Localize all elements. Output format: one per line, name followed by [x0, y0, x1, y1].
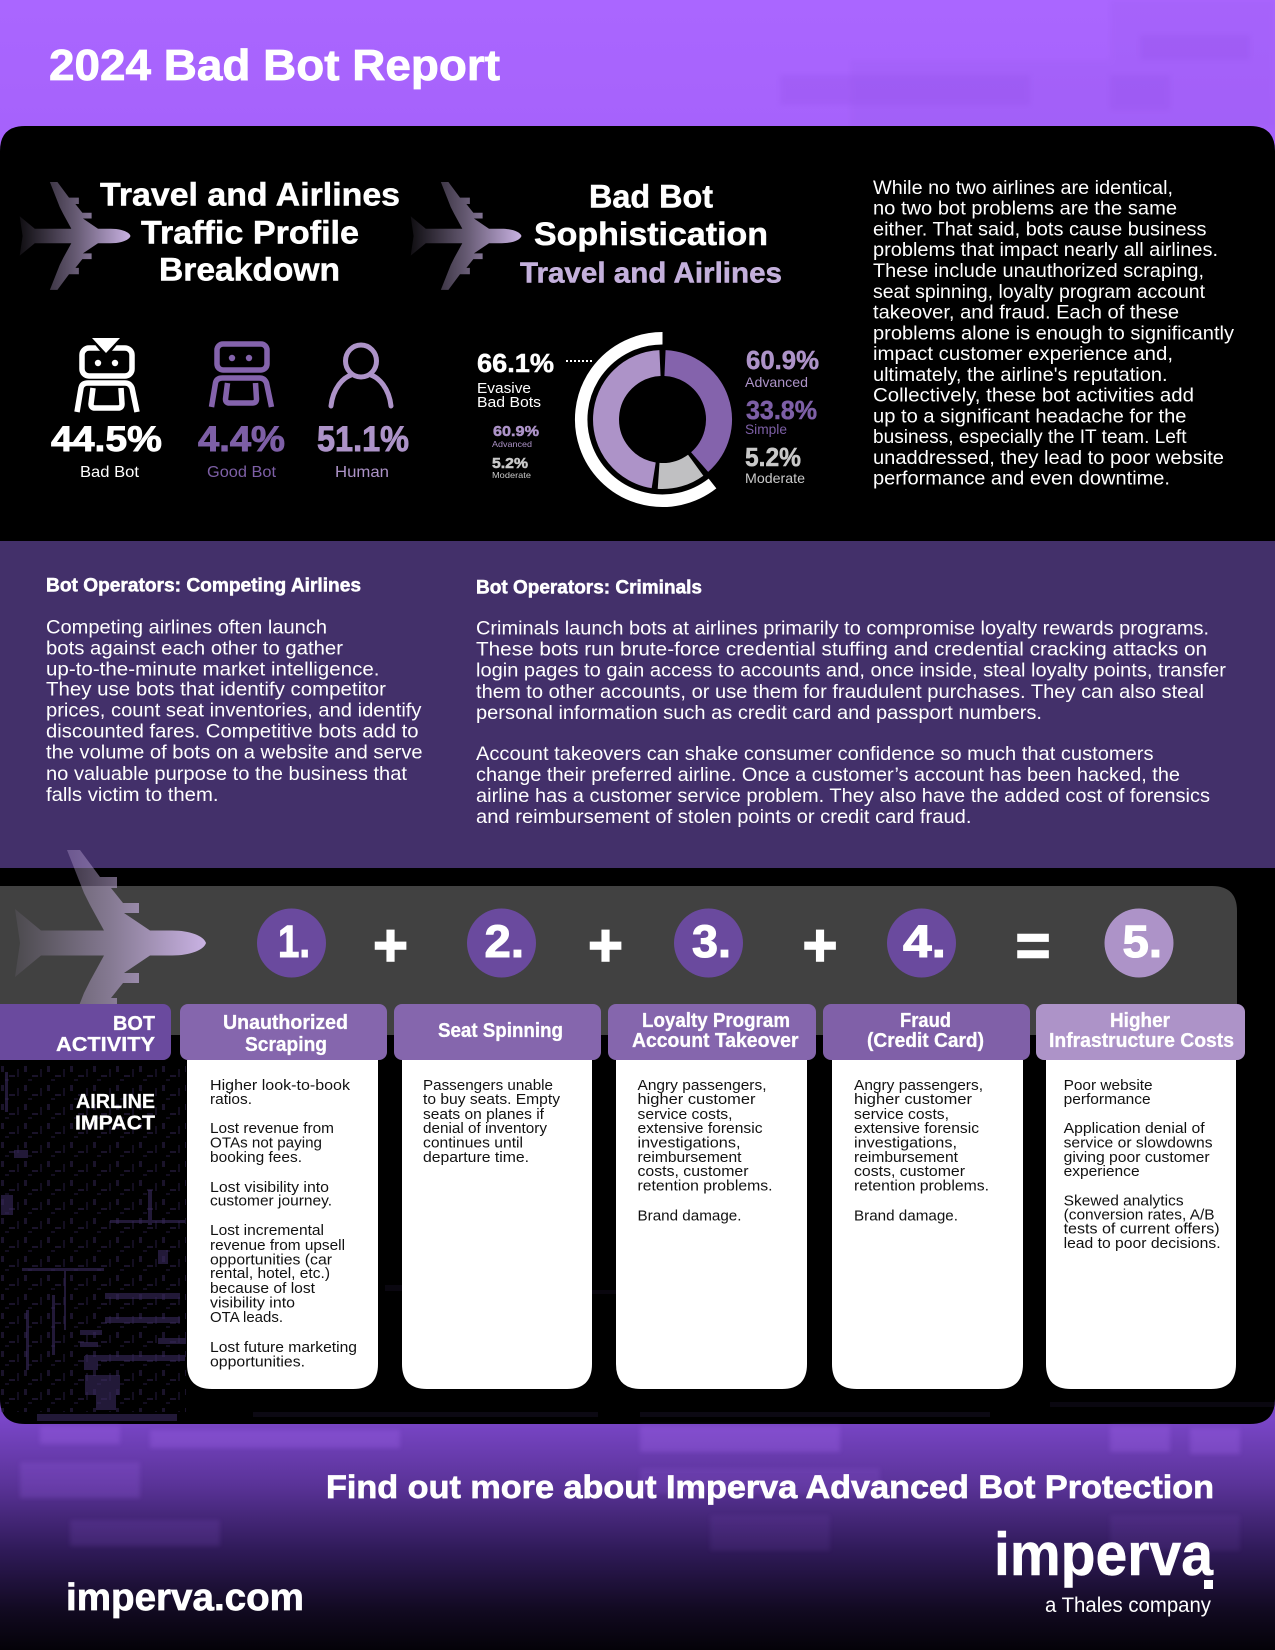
column 3: loyalty program account takeover: Loyalty Program — [642, 1009, 790, 1032]
panel: traffic profile and sophistication — [0, 126, 1275, 541]
stat: bad bot: 44.5% — [51, 420, 162, 459]
text block: competing airlines: bots against each other to gather — [46, 638, 344, 660]
text block: intro: Collectively, these bot activities add — [873, 384, 1194, 406]
header: bot activity: ACTIVITY — [56, 1033, 155, 1056]
text block: criminals: airline has a customer service problem. They also have the added cost of forensics — [476, 785, 1210, 807]
column 2: seat spinning: to buy seats. Empty — [423, 1091, 561, 1108]
text block: intro: business, especially the IT team. Left — [873, 426, 1187, 448]
text block: intro — [873, 177, 1234, 490]
column 2: seat spinning: seats on planes if — [423, 1106, 545, 1123]
column 4: fraud credit card: (Credit Card) — [867, 1029, 984, 1052]
column 5: higher infrastructure costs: lead to poor decisions. — [1064, 1235, 1221, 1252]
text block: intro: seat spinning, loyalty program account — [873, 281, 1206, 303]
column 1: unauthorized scraping: booking fees. — [210, 1149, 302, 1166]
step 3 — [674, 908, 743, 978]
text block: intro: While no two airlines are identical, — [873, 177, 1173, 199]
label: airline impact: IMPACT — [75, 1112, 155, 1134]
column 4: fraud credit card: Brand damage. — [854, 1208, 958, 1224]
icon: large plane — [15, 850, 206, 1036]
heading: criminals: Bot Operators: Criminals — [476, 578, 702, 598]
column 5: higher infrastructure costs: Infrastructure Costs — [1049, 1029, 1234, 1052]
text block: intro: takeover, and fraud. Each of these — [873, 302, 1179, 324]
step 2 — [467, 908, 536, 978]
text block: criminals: login pages to gain access to accounts and, once inside, steal loyalty points, transfer — [476, 660, 1227, 682]
column 1: unauthorized scraping: OTA leads. — [210, 1309, 283, 1326]
column 5: higher infrastructure costs: giving poor customer — [1064, 1149, 1210, 1166]
panel: bot operators — [0, 541, 1275, 868]
text block: criminals: them to other accounts, or use them for fraudulent purchases. They can also steal — [476, 681, 1204, 703]
heading: sophistication: Bad Bot — [589, 178, 713, 214]
text block: criminals: personal information such as credit card and passport numbers. — [476, 702, 1042, 724]
column 2: seat spinning: Passengers unable — [423, 1077, 553, 1094]
column 3: loyalty program account takeover: investigations, — [638, 1135, 740, 1152]
plus: + — [373, 912, 408, 979]
stat: bad bot — [51, 420, 162, 481]
column 3: loyalty program account takeover: higher customer — [638, 1091, 756, 1108]
column 1: unauthorized scraping: OTAs not paying — [210, 1135, 322, 1152]
column 3: loyalty program account takeover: costs, customer — [638, 1163, 749, 1180]
column 4: fraud credit card: extensive forensic — [854, 1120, 980, 1137]
stat: evasive bad bots — [477, 348, 592, 411]
column 4: fraud credit card: costs, customer — [854, 1163, 965, 1180]
column 4: fraud credit card — [823, 1004, 1030, 1389]
heading: traffic profile: Traffic Profile — [141, 214, 359, 250]
column 1: unauthorized scraping: visibility into — [210, 1295, 295, 1312]
text block: intro: ultimately, the airline's reputation. — [873, 364, 1168, 386]
column 1: unauthorized scraping: Higher look-to-book — [210, 1077, 351, 1094]
column 5: higher infrastructure costs: (conversion rates, A/B — [1064, 1207, 1215, 1224]
column 4: fraud credit card: Angry passengers, — [854, 1077, 983, 1094]
column 3: loyalty program account takeover: Account Takeover — [632, 1029, 799, 1052]
stat: good bot — [198, 420, 285, 481]
text block: competing airlines: Competing airlines often launch — [46, 617, 327, 639]
heading: sophistication: Sophistication — [534, 216, 768, 252]
logo: imperva: imperva — [994, 1521, 1214, 1588]
column 4: fraud credit card: higher customer — [854, 1091, 972, 1108]
column 5: higher infrastructure costs: tests of current offers) — [1064, 1221, 1220, 1238]
text block: competing airlines: the volume of bots on a website and serve — [46, 742, 423, 764]
column 1: unauthorized scraping: because of lost — [210, 1280, 316, 1297]
logo: imperva — [994, 1521, 1214, 1617]
label: airline impact: AIRLINE — [76, 1090, 155, 1113]
text block: intro: problems alone is enough to significantly — [873, 322, 1234, 344]
column 5: higher infrastructure costs: Poor website — [1064, 1077, 1153, 1094]
legend: evasive breakdown — [492, 423, 539, 480]
text block: competing airlines: up-to-the-minute market intelligence. — [46, 659, 380, 681]
column 4: fraud credit card: reimbursement — [854, 1149, 959, 1166]
step 4 — [887, 908, 956, 978]
step 5 — [1104, 908, 1174, 978]
text block: intro: performance and even downtime. — [873, 468, 1170, 490]
stat: human: Human — [335, 464, 389, 481]
stat: good bot: 4.4% — [198, 420, 285, 459]
column 2: seat spinning: Seat Spinning — [438, 1019, 563, 1042]
step 5: 5. — [1122, 916, 1162, 967]
text block: criminals: change their preferred airline. Once a customer’s account has been hacked, the — [476, 764, 1180, 786]
column 1: unauthorized scraping: revenue from upsell — [210, 1237, 345, 1254]
heading: sophistication — [520, 178, 782, 290]
plus: + — [802, 912, 838, 979]
heading: traffic profile: Travel and Airlines — [100, 176, 400, 212]
column 5: higher infrastructure costs: experience — [1064, 1163, 1140, 1180]
plus: + — [588, 912, 623, 979]
column 3: loyalty program account takeover: Angry passengers, — [638, 1077, 766, 1094]
text block: criminals: Account takeovers can shake consumer confidence so much that customers — [476, 743, 1154, 765]
text block: intro: up to a significant headache for the — [873, 405, 1186, 427]
stat: evasive bad bots: Evasive — [477, 380, 531, 397]
text block: intro: These include unauthorized scraping, — [873, 260, 1204, 282]
legend: donut chart: 60.9% — [746, 345, 819, 375]
legend: evasive breakdown: 60.9% — [493, 423, 539, 440]
logo: imperva: a Thales company — [1045, 1594, 1211, 1617]
icon: plane right — [411, 182, 521, 290]
column 1: unauthorized scraping — [180, 1004, 387, 1389]
header: bot activity: BOT — [113, 1012, 155, 1035]
step 2: 2. — [484, 916, 524, 967]
column 5: higher infrastructure costs: Application denial of — [1064, 1120, 1205, 1137]
text block: criminals — [476, 618, 1227, 828]
heading: sophistication: Travel and Airlines — [520, 258, 782, 290]
legend: donut chart: 5.2% — [745, 442, 801, 472]
column 1: unauthorized scraping: customer journey. — [210, 1193, 332, 1210]
step 1 — [257, 908, 326, 978]
text block: criminals: and reimbursement of stolen points or credit card fraud. — [476, 806, 972, 828]
column 1: unauthorized scraping: opportunities (car — [210, 1252, 332, 1268]
text block: criminals: These bots run brute-force credential stuffing and credential cracking attacks on — [476, 639, 1207, 661]
step 1: 1. — [278, 916, 310, 967]
title: 2024 Bad Bot Report — [49, 41, 500, 90]
icon: plane left — [20, 182, 130, 290]
column 3: loyalty program account takeover: extensive forensic — [638, 1120, 763, 1137]
heading: traffic profile: Breakdown — [159, 252, 340, 288]
icon: good bot — [212, 344, 272, 407]
text block: intro: unaddressed, they lead to poor website — [873, 447, 1224, 469]
column 4: fraud credit card: retention problems. — [854, 1178, 989, 1195]
heading: traffic profile — [100, 176, 400, 288]
text block: competing airlines: falls victim to them. — [46, 784, 218, 806]
text block: intro: either. That said, bots cause business — [873, 218, 1207, 240]
step 4: 4. — [903, 916, 946, 967]
donut chart — [581, 338, 719, 501]
stat: bad bot: Bad Bot — [80, 464, 140, 481]
text block: competing airlines: no valuable purpose to the business that — [46, 763, 408, 785]
text block: intro: impact customer experience and, — [873, 343, 1173, 365]
column 3: loyalty program account takeover: Brand damage. — [638, 1208, 742, 1224]
column 2: seat spinning: denial of inventory — [423, 1120, 548, 1137]
text block: competing airlines: discounted fares. Competitive bots add to — [46, 721, 419, 743]
stat: human: 51.1% — [317, 420, 409, 459]
header: bot activity — [0, 1004, 171, 1060]
icon: human — [331, 345, 391, 406]
legend: evasive breakdown: Moderate — [492, 470, 531, 480]
label: airline impact — [75, 1090, 155, 1134]
equals: = — [1015, 912, 1051, 979]
column 1: unauthorized scraping: ratios. — [210, 1091, 252, 1108]
column 1: unauthorized scraping: Unauthorized — [223, 1011, 348, 1034]
call to action: Find out more about Imperva Advanced Bot Protection — [326, 1469, 1214, 1505]
heading: competing airlines: Bot Operators: Competing Airlines — [46, 576, 361, 596]
stat: evasive bad bots: 66.1% — [477, 348, 554, 378]
column 5: higher infrastructure costs: Skewed analytics — [1064, 1193, 1184, 1210]
column 3: loyalty program account takeover: reimbursement — [638, 1149, 742, 1166]
legend: evasive breakdown: 5.2% — [492, 455, 528, 472]
column 1: unauthorized scraping: Scraping — [245, 1033, 327, 1056]
icon: bad bot — [77, 335, 137, 412]
step 3: 3. — [692, 916, 731, 967]
column 3: loyalty program account takeover: service costs, — [638, 1106, 732, 1123]
stat: evasive bad bots: Bad Bots — [477, 394, 541, 411]
legend: evasive breakdown: Advanced — [492, 439, 532, 449]
text block: criminals: Criminals launch bots at airlines primarily to compromise loyalty rewards programs. — [476, 618, 1209, 640]
text block: competing airlines: They use bots that identify competitor — [46, 679, 387, 701]
legend: donut chart — [745, 345, 819, 486]
text block: intro: no two bot problems are the same — [873, 198, 1177, 220]
text block: intro: problems that impact nearly all airlines. — [873, 239, 1218, 261]
stat: good bot: Good Bot — [207, 464, 277, 481]
column 1: unauthorized scraping: Lost incremental — [210, 1222, 324, 1239]
column 4: fraud credit card: investigations, — [854, 1135, 957, 1152]
band: process background — [0, 886, 1237, 1035]
legend: donut chart: Advanced — [745, 374, 808, 390]
text block: competing airlines — [46, 617, 423, 806]
column 5: higher infrastructure costs: performance — [1064, 1091, 1151, 1108]
column 2: seat spinning — [394, 1004, 601, 1389]
column 5: higher infrastructure costs — [1036, 1004, 1245, 1389]
column 1: unauthorized scraping: Lost visibility into — [210, 1179, 329, 1196]
panel: bot activity and airline impact — [0, 850, 1275, 1424]
column 1: unauthorized scraping: Lost future marketing — [210, 1339, 357, 1356]
stat: human — [317, 420, 409, 481]
column 4: fraud credit card: service costs, — [854, 1106, 949, 1123]
column 3: loyalty program account takeover — [608, 1004, 816, 1389]
column 1: unauthorized scraping: opportunities. — [210, 1354, 305, 1371]
column 1: unauthorized scraping: Lost revenue from — [210, 1120, 334, 1137]
legend: donut chart: Moderate — [745, 470, 805, 486]
legend: donut chart: 33.8% — [746, 395, 817, 425]
column 5: higher infrastructure costs: service or slowdowns — [1064, 1135, 1213, 1152]
text block: competing airlines: prices, count seat inventories, and identify — [46, 700, 422, 722]
column 5: higher infrastructure costs: Higher — [1110, 1009, 1170, 1032]
column 1: unauthorized scraping: rental, hotel, etc.) — [210, 1265, 330, 1282]
column 3: loyalty program account takeover: retention problems. — [638, 1178, 772, 1195]
legend: donut chart: Simple — [745, 421, 787, 437]
column 4: fraud credit card: Fraud — [900, 1009, 951, 1032]
website: imperva.com — [66, 1577, 304, 1619]
column 2: seat spinning: departure time. — [423, 1149, 529, 1166]
column 2: seat spinning: continues until — [423, 1135, 523, 1152]
